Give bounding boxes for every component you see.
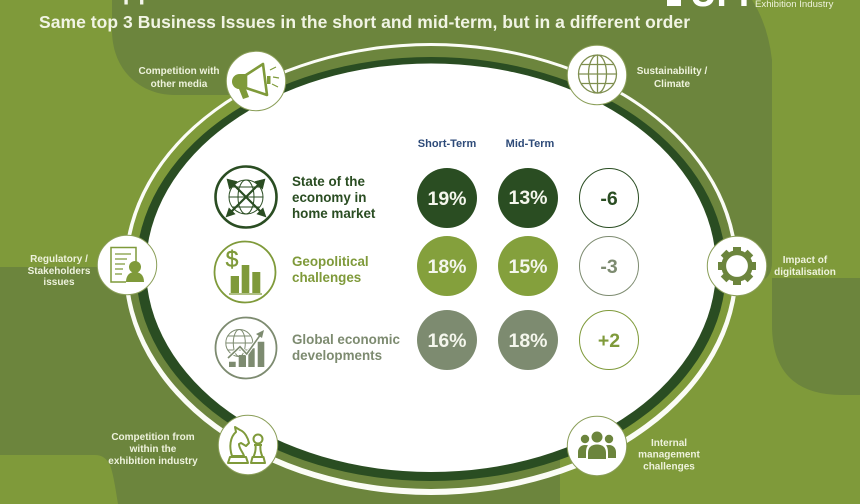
icon: globe with crossed arrows: [216, 166, 276, 228]
logo (cropped at top edge): [667, 0, 834, 15]
change value: +2: [598, 330, 620, 352]
label: internal management challenges: Internal: [651, 438, 687, 449]
mid-term value: 15%: [508, 256, 548, 278]
label: impact of digitalisation: digitalisation: [774, 267, 836, 278]
column headers: Short-Term: [418, 138, 476, 150]
column headers: Mid-Term: [506, 138, 555, 150]
change value: [580, 168, 638, 228]
icon: group of people: [567, 416, 627, 476]
label: competition from within the exhibition industry: within the: [129, 444, 177, 455]
label: developments: [292, 348, 382, 363]
mid-term value: 13%: [508, 187, 548, 209]
short-term value: [417, 168, 477, 228]
icon: megaphone: [226, 51, 286, 111]
mid-term value: [498, 310, 558, 370]
label: competition with other media: other media: [151, 79, 208, 90]
label: regulatory / stakeholders issues: Stakeholders: [28, 266, 91, 277]
row: global economic developments: [216, 310, 638, 378]
change value: -6: [600, 188, 618, 210]
label: competition with other media: Competition with: [138, 66, 220, 77]
icon: globe: [567, 45, 627, 105]
label: State of the: [292, 174, 365, 189]
label: sustainability / climate: Sustainability /: [637, 66, 708, 77]
icon: document and person: [97, 235, 157, 295]
label: Geopolitical: [292, 254, 369, 269]
short-term value: [417, 236, 477, 296]
change value: [580, 236, 638, 296]
icon: chess pieces: [218, 415, 278, 475]
row: geopolitical challenges: [214, 236, 638, 302]
label: regulatory / stakeholders issues: Regulatory /: [30, 254, 88, 265]
short-term value: [417, 310, 477, 370]
icon: gear: [707, 236, 767, 296]
label: competition from within the exhibition industry: Competition from: [111, 432, 195, 443]
short-term value: 19%: [427, 188, 467, 210]
icon: dollar and bars: [214, 242, 276, 302]
label: challenges: [292, 270, 361, 285]
column headers: [418, 138, 555, 150]
mid-term value: [498, 236, 558, 296]
short-term value: 16%: [427, 330, 467, 352]
change value: -3: [600, 256, 618, 278]
central oval with rings: [124, 43, 738, 495]
label: economy in: [292, 190, 366, 205]
label: Global economic: [292, 332, 400, 347]
change value: [580, 310, 638, 370]
row: state of the economy: [216, 166, 638, 228]
icon: dollar and bars: $: [226, 246, 239, 272]
label: regulatory / stakeholders issues: issues: [43, 277, 75, 288]
short-term value: 18%: [427, 256, 467, 278]
mid-term value: 18%: [508, 330, 548, 352]
label: internal management challenges: management: [638, 450, 701, 460]
label: home market: [292, 206, 376, 221]
mid-term value: [498, 168, 558, 228]
label: competition from within the exhibition industry: exhibition industry: [108, 456, 198, 467]
label: internal management challenges: challenges: [643, 462, 695, 472]
subtitle: Same top 3 Business Issues in the short and mid-term, but in a different order: [39, 12, 690, 32]
icon: globe and rising chart: [216, 318, 276, 378]
label: impact of digitalisation: Impact of: [783, 255, 828, 266]
label: sustainability / climate: Climate: [654, 79, 690, 90]
